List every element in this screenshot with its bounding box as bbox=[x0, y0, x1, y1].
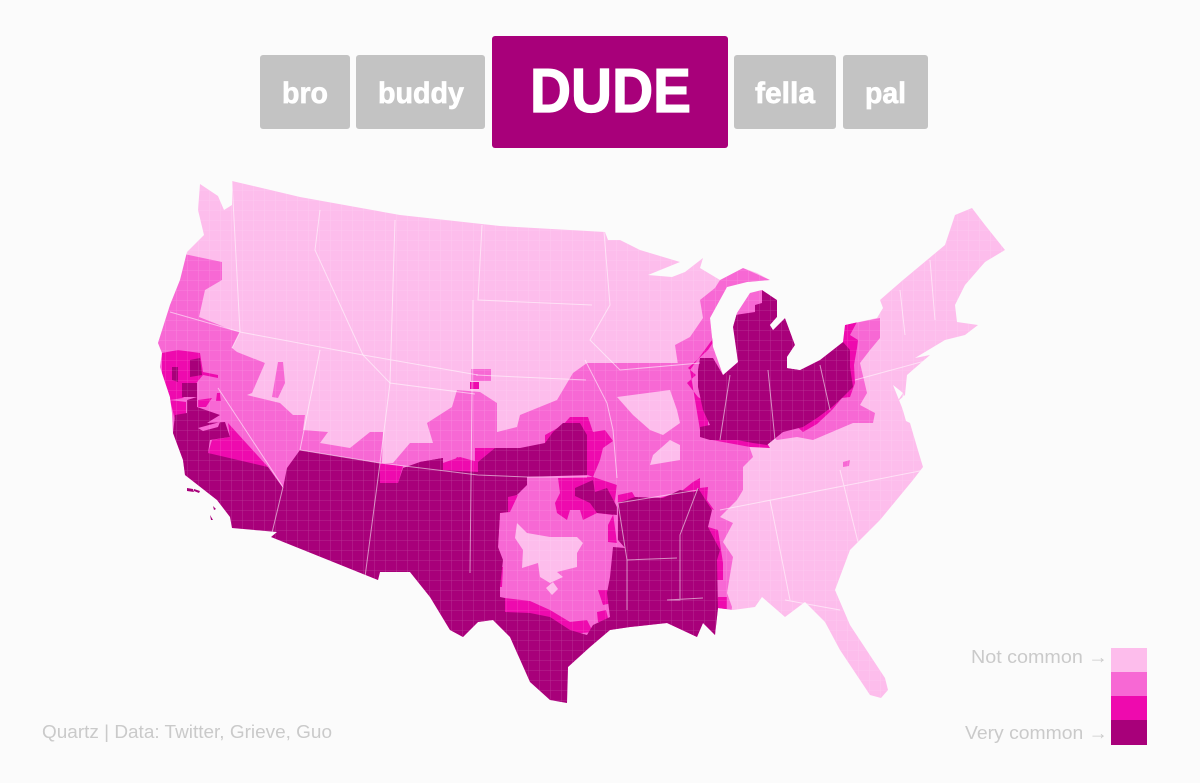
pale holes in the midwest and Oklahoma bbox=[515, 390, 680, 595]
choropleth map of the United States bbox=[150, 170, 1020, 710]
map layer: very common bbox=[170, 290, 853, 710]
legend label: very common: Very common → bbox=[965, 723, 1108, 743]
source credit: Quartz | Data: Twitter, Grieve, Guo bbox=[42, 722, 332, 742]
Chesapeake Bay bbox=[902, 393, 910, 423]
map layer: somewhat common bbox=[150, 250, 880, 680]
word selector buttons bbox=[260, 36, 928, 148]
button: DUDE (selected) bbox=[492, 36, 728, 148]
button: pal: pal bbox=[865, 77, 906, 110]
button: pal bbox=[843, 55, 928, 129]
button: buddy: buddy bbox=[378, 77, 464, 110]
CA islands bbox=[187, 488, 216, 520]
button: fella bbox=[734, 55, 836, 129]
button: DUDE (selected): DUDE bbox=[530, 57, 691, 126]
county grid texture bbox=[150, 170, 1020, 710]
legend bbox=[965, 647, 1147, 745]
button: fella: fella bbox=[755, 77, 815, 110]
button: bro bbox=[260, 55, 350, 129]
legend swatches bbox=[1111, 648, 1147, 745]
state borders bbox=[170, 181, 965, 610]
medium fingers in the California valley bbox=[198, 422, 220, 431]
map layer: common bbox=[162, 322, 858, 634]
button: buddy bbox=[356, 55, 485, 129]
legend label: not common: Not common → bbox=[971, 647, 1108, 667]
map layer: not common bbox=[150, 170, 1020, 710]
button: bro: bro bbox=[282, 77, 328, 110]
